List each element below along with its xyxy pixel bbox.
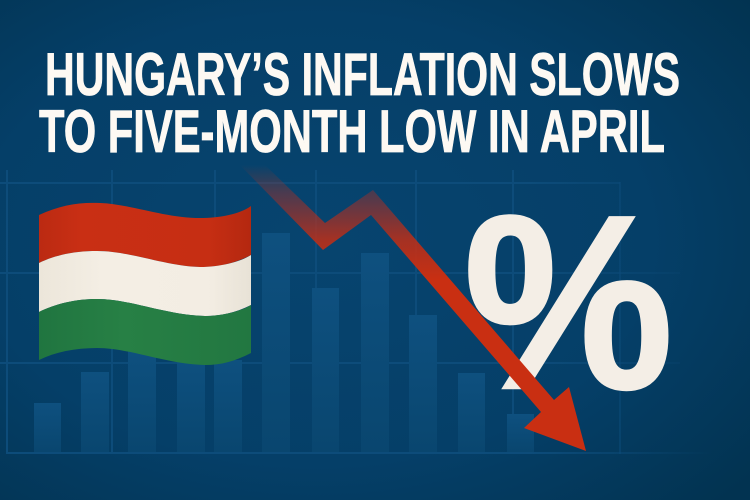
percent sign: % xyxy=(464,163,674,441)
chart grid xyxy=(0,170,717,454)
icon: Hungarian flag xyxy=(39,203,251,365)
bar chart xyxy=(34,233,534,452)
flag stripe: red xyxy=(39,203,251,267)
title xyxy=(39,41,680,165)
falling arrow xyxy=(240,165,586,451)
flag stripe: green xyxy=(39,299,251,365)
flag stripe: white xyxy=(39,251,251,316)
